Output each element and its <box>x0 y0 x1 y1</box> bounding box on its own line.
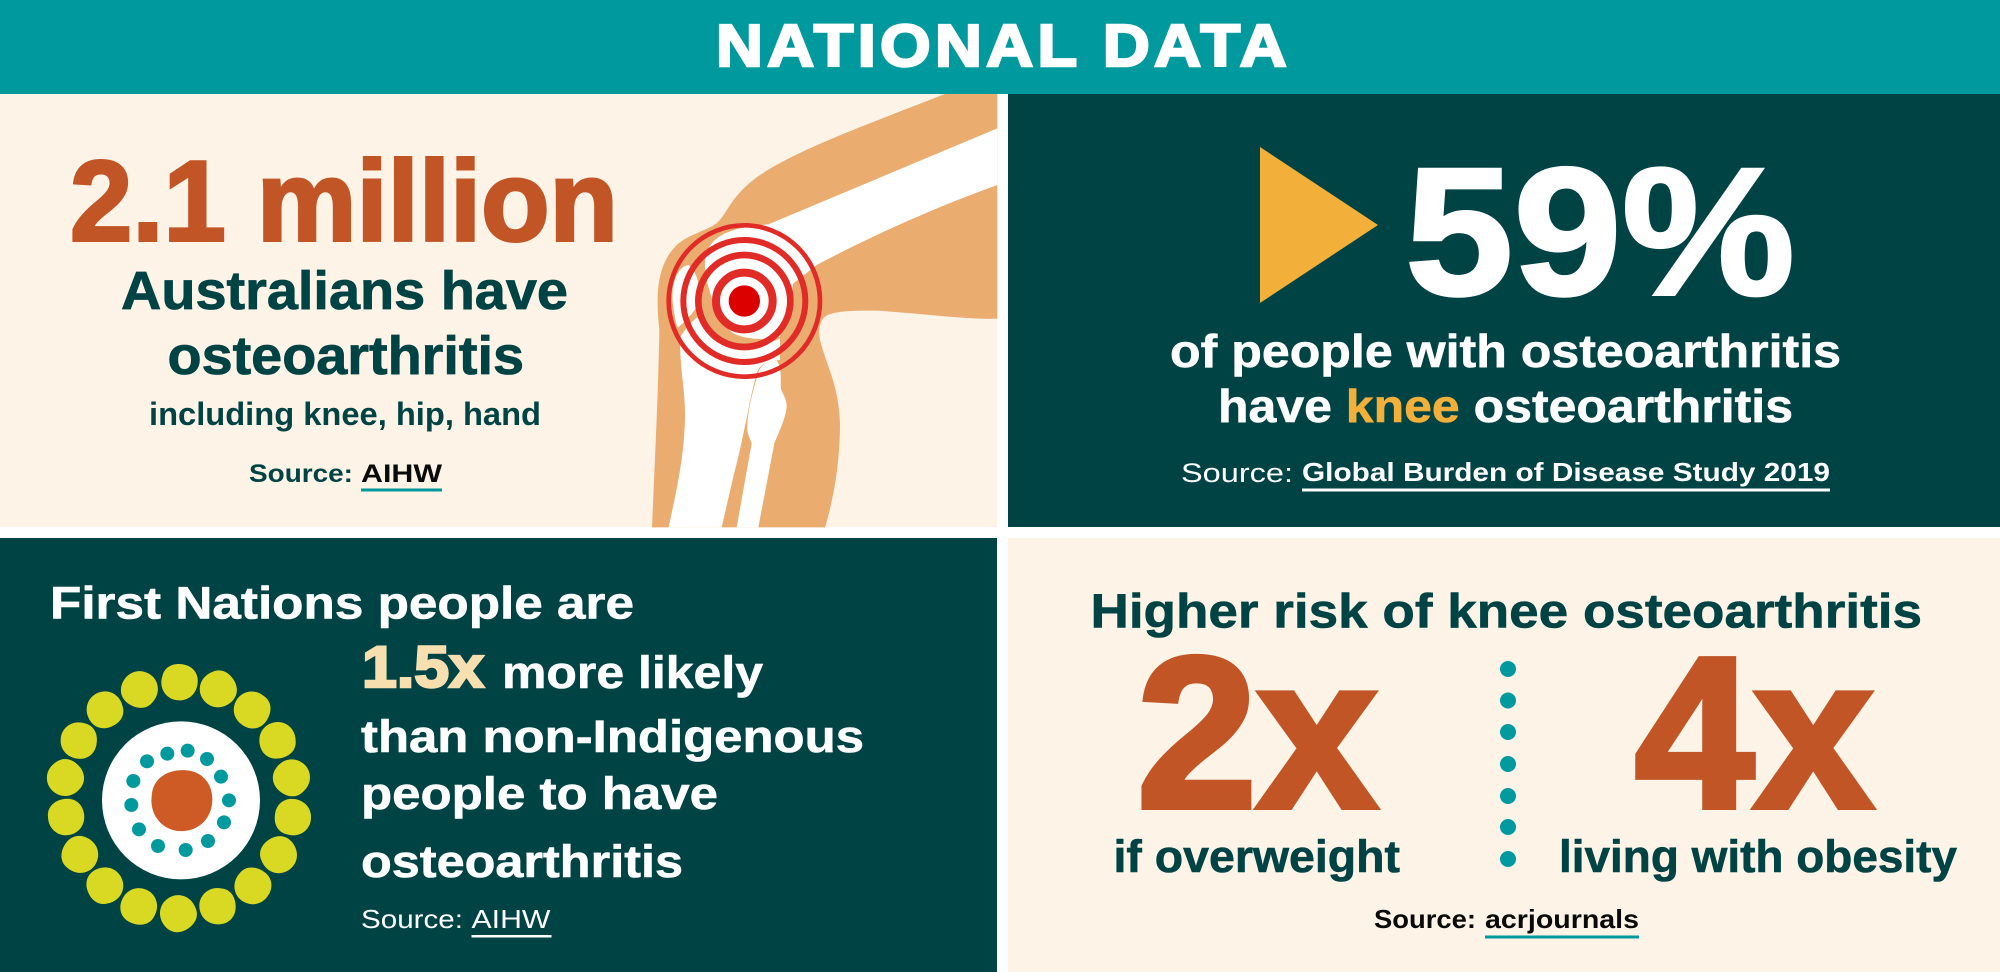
white centre <box>102 721 260 879</box>
text: Australians have osteoarthritis: Australians have <box>121 261 568 321</box>
pain target rings <box>669 225 820 377</box>
yellow outer dots <box>40 661 317 938</box>
source: Global Burden of Disease Study 2019: Global Burden of Disease Study 2019 <box>1302 457 1830 487</box>
header banner <box>0 0 2000 94</box>
source: AIHW: Source: <box>249 460 353 488</box>
title: NATIONAL DATA <box>716 13 1291 79</box>
source: Global Burden of Disease Study 2019: Source: <box>1181 458 1293 488</box>
bones <box>669 128 997 527</box>
source: AIHW: AIHW <box>361 460 442 488</box>
text: more likely than non-Indigenous people to have osteoarthritis: osteoarthritis <box>361 836 683 887</box>
teal inner dots <box>124 744 236 857</box>
text: of people with knee osteoarthritis: have knee osteoarthritis <box>1218 380 1793 432</box>
callout: 1.5x: 1.5x <box>362 635 484 700</box>
big number: 59%: 59% <box>1405 130 1795 334</box>
source: AIHW: Source: <box>361 904 463 934</box>
text: more likely than non-Indigenous people to have osteoarthritis: than non-Indigenous <box>361 711 864 762</box>
icon: orange triangle <box>1260 147 1378 303</box>
leg silhouette <box>652 94 997 527</box>
source: acrjournals: Source: <box>1374 904 1476 934</box>
illustration: knee joint with pain target <box>652 94 997 527</box>
heading: First Nations people are: First Nations people are <box>50 578 634 628</box>
stat: 4x living with obesity <box>1559 612 1957 882</box>
text: more likely than non-Indigenous people to have osteoarthritis: people to have <box>361 768 718 819</box>
stat: 4x living with obesity: living with obesity <box>1559 831 1957 882</box>
orange core <box>151 770 212 831</box>
text: of people with knee osteoarthritis <box>1170 325 1841 432</box>
source: acrjournals <box>1374 904 1639 938</box>
panel: higher risk of knee osteoarthritis <box>1008 538 2000 972</box>
text: more likely than non-Indigenous people to have osteoarthritis <box>361 647 864 887</box>
source: AIHW <box>361 904 552 938</box>
text: more likely than non-Indigenous people to have osteoarthritis: more likely <box>502 647 763 698</box>
stat: 2x if overweight: 2x <box>1137 612 1377 853</box>
big number: 2.1 million: 2.1 million <box>70 138 618 266</box>
panel: 2.1 million Australians <box>0 94 997 527</box>
stat: 4x living with obesity: 4x <box>1635 612 1873 853</box>
dotted divider <box>1500 661 1516 867</box>
source: AIHW: AIHW <box>472 904 551 934</box>
text: Australians have osteoarthritis <box>121 261 568 386</box>
heading: Higher risk of knee osteoarthritis: Higher risk of knee osteoarthritis <box>1090 586 1922 638</box>
text: Australians have osteoarthritis: osteoarthritis <box>168 326 524 386</box>
text: of people with knee osteoarthritis: of people with osteoarthritis <box>1170 325 1841 377</box>
text: including knee, hip, hand: including knee, hip, hand <box>149 396 541 432</box>
panel: 59% knee osteoarthritis <box>1008 94 2000 527</box>
source: acrjournals: acrjournals <box>1485 904 1639 934</box>
icon: First Nations dot circle <box>40 661 317 938</box>
stat: 2x if overweight: if overweight <box>1114 831 1400 882</box>
source: AIHW <box>249 460 442 492</box>
panel: First Nations people <box>0 538 997 972</box>
source: Global Burden of Disease Study 2019 <box>1181 457 1830 492</box>
